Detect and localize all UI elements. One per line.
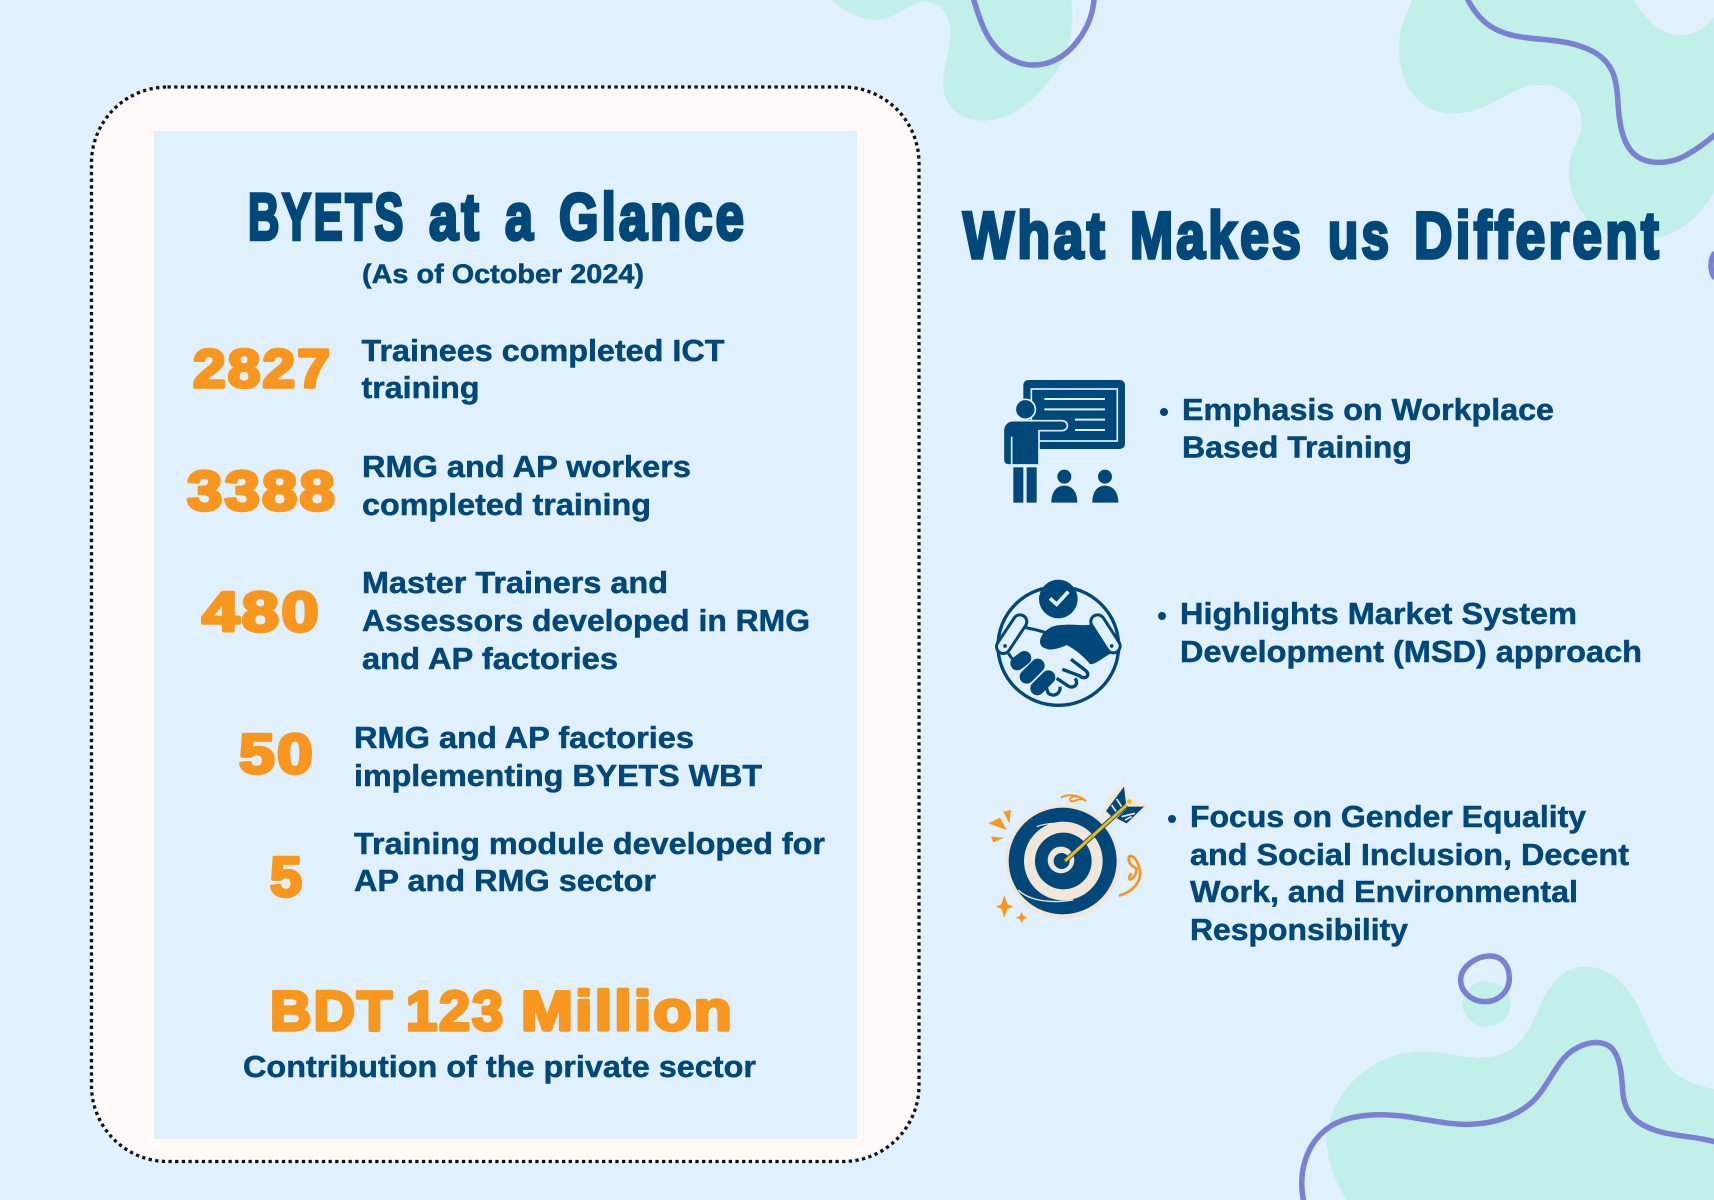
stat: 2827 trainees: 2827: [193, 339, 332, 399]
stat: 50 factories: [239, 721, 762, 793]
decoration: top centre blob: [832, 0, 1094, 121]
stat: 50 factories: RMG and AP factories: [354, 721, 694, 755]
text: workplace based training: Emphasis on Workplace: [1182, 393, 1554, 427]
text: workplace based training: Based Training: [1182, 430, 1412, 464]
decoration: right edge arc: [1711, 254, 1714, 277]
icon: target with arrow: [988, 782, 1148, 924]
heading: BYETS at a Glance: at: [429, 180, 482, 254]
text: gender equality and inclusion: and Social Inclusion, Decent: [1190, 838, 1629, 872]
callout: BDT 123 Million: [243, 979, 756, 1084]
text: market system development: Development (MSD) approach: [1180, 635, 1642, 669]
callout: BDT 123 Million: 123: [406, 979, 505, 1042]
stat: 480 master trainers: 480: [202, 580, 321, 643]
text: gender equality and inclusion: [1168, 800, 1629, 947]
stat: 50 factories: 50: [239, 722, 315, 785]
stat: 5 modules: Training module developed for: [354, 827, 825, 861]
decoration: top right blob: [1399, 0, 1714, 241]
stat: 480 master trainers: [202, 566, 810, 676]
stat: 480 master trainers: Assessors developed in RMG: [362, 604, 810, 638]
heading: What Makes us Different: Different: [1414, 198, 1662, 272]
stat: 3388 workers: RMG and AP workers: [362, 450, 691, 484]
stat: 5 modules: AP and RMG sector: [354, 864, 656, 898]
stat: 5 modules: [270, 827, 825, 908]
decoration: bottom right blob: [1302, 956, 1714, 1200]
text: market system development: [1158, 597, 1642, 669]
text: gender equality and inclusion: Work, and Environmental: [1190, 875, 1578, 909]
subheading: date: (As of October 2024): [362, 259, 644, 289]
stat: 2827 trainees: training: [362, 371, 480, 405]
heading: BYETS at a Glance: [248, 180, 747, 254]
stat: 5 modules: 5: [270, 845, 304, 908]
heading: What Makes us Different: [963, 198, 1662, 272]
icon: handshake: [998, 580, 1119, 705]
stat: 3388 workers: completed training: [362, 488, 651, 522]
stat: 50 factories: implementing BYETS WBT: [354, 759, 762, 793]
callout: BDT 123 Million: Contribution of the private sector: [243, 1050, 756, 1084]
callout: BDT 123 Million: Million: [521, 979, 734, 1042]
heading: What Makes us Different: Makes: [1130, 198, 1304, 272]
heading: What Makes us Different: us: [1328, 198, 1392, 272]
stat: 3388 workers: 3388: [187, 459, 337, 522]
stat: 2827 trainees: Trainees completed ICT: [362, 334, 725, 368]
icon: trainer at board: [1003, 380, 1125, 503]
text: gender equality and inclusion: Focus on Gender Equality: [1190, 800, 1586, 834]
text: gender equality and inclusion: Responsibility: [1190, 913, 1408, 947]
heading: BYETS at a Glance: Glance: [559, 180, 747, 254]
heading: BYETS at a Glance: a: [505, 180, 536, 254]
stat: 480 master trainers: and AP factories: [362, 642, 618, 676]
stat: 480 master trainers: Master Trainers and: [362, 566, 668, 600]
text: market system development: Highlights Market System: [1180, 597, 1577, 631]
text: workplace based training: [1160, 393, 1554, 464]
panel: BYETS at a Glance: [92, 87, 919, 1162]
stat: 3388 workers: [187, 450, 691, 522]
callout: BDT 123 Million: BDT: [270, 979, 394, 1042]
stat: 2827 trainees: [193, 334, 725, 405]
heading: BYETS at a Glance: BYETS: [248, 180, 406, 254]
heading: What Makes us Different: What: [963, 198, 1108, 272]
